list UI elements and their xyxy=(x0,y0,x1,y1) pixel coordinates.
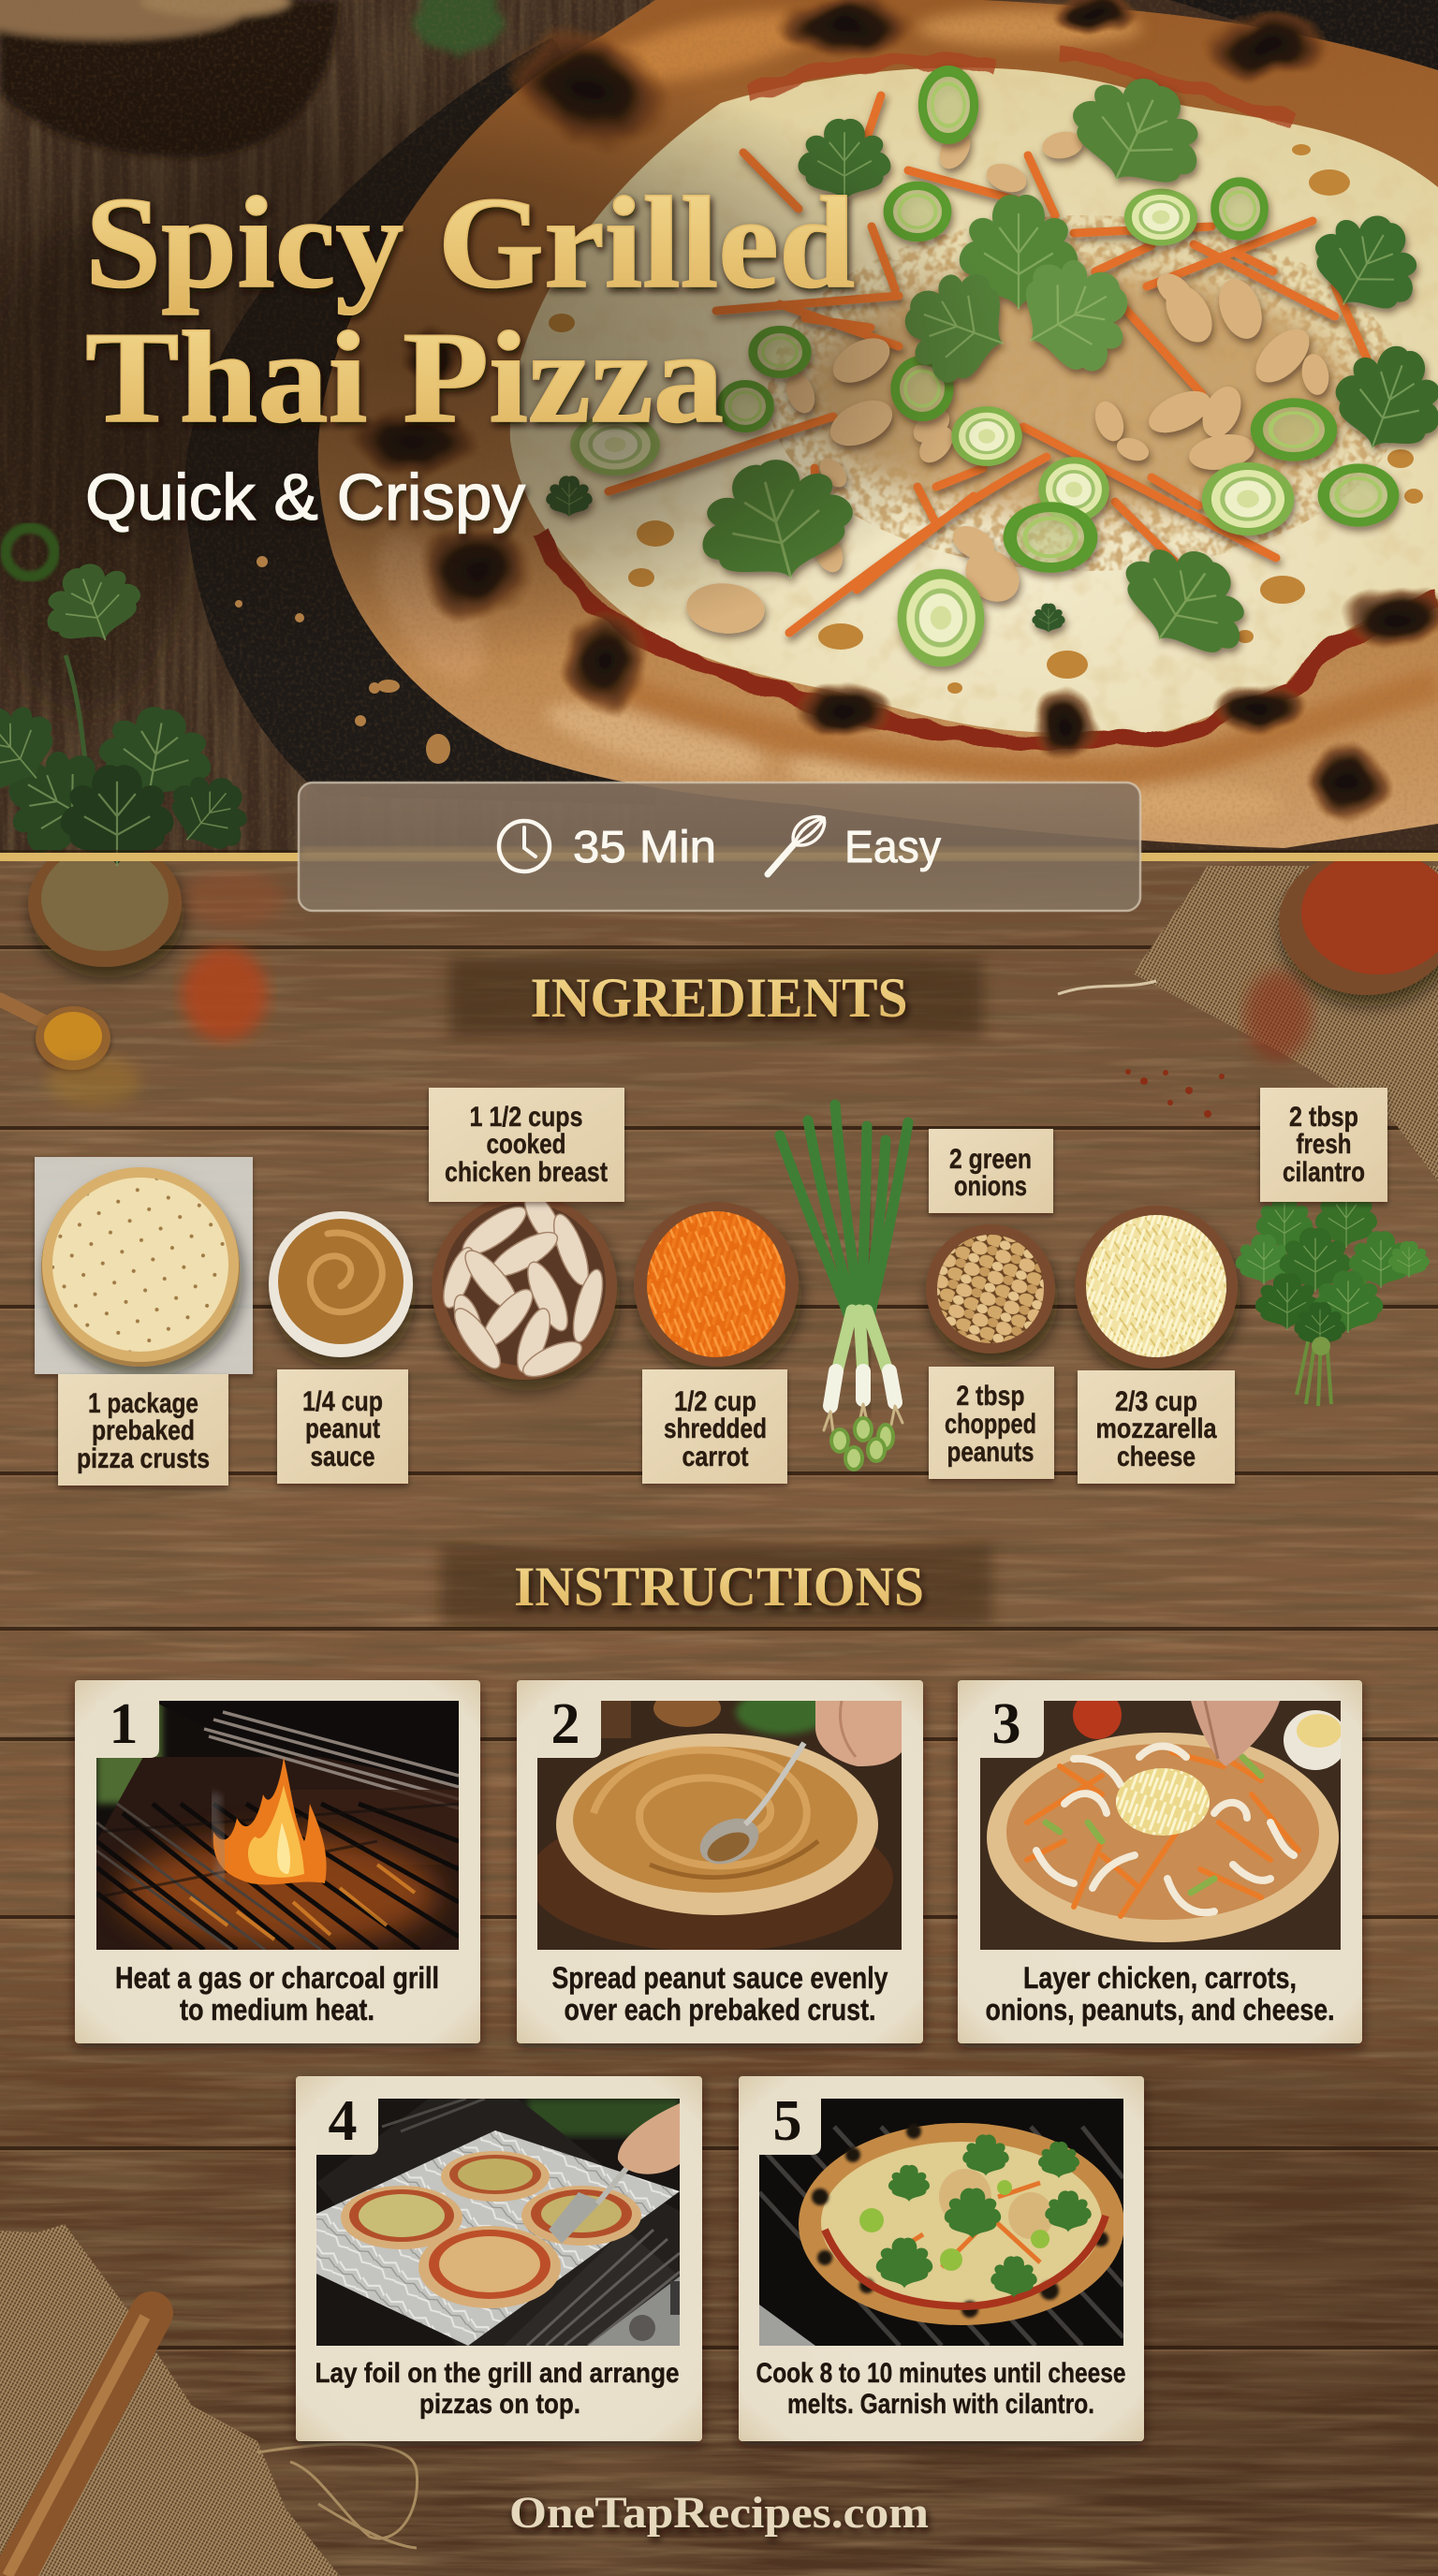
blurred peanut bowl xyxy=(0,0,339,157)
step 4 text: Lay foil on the grill and arrange xyxy=(315,2358,680,2389)
time and difficulty badge xyxy=(299,783,1140,911)
step 3 text: Layer chicken, carrots, xyxy=(1023,1961,1297,1995)
ingredient label: peanut sauce xyxy=(277,1369,408,1484)
step 4 image: pizzas on foil xyxy=(316,2099,680,2346)
cheese layer xyxy=(510,67,1438,735)
ingredient label: cilantro: fresh xyxy=(1296,1129,1352,1160)
step card 5: 5 xyxy=(773,2089,801,2153)
ingredient label: crust: prebaked xyxy=(92,1415,195,1446)
step card 3: 3 xyxy=(992,1692,1020,1756)
ingredient label: peanut sauce: sauce xyxy=(311,1442,374,1472)
number tab xyxy=(759,2099,821,2155)
step card 3 xyxy=(958,1680,1362,2043)
peanut mound xyxy=(805,271,1348,515)
ingredients heading xyxy=(449,958,983,1037)
step card 2: 2 xyxy=(550,1692,580,1756)
ingredient label: peanut sauce: peanut xyxy=(305,1413,380,1444)
ingredient: peanuts bowl xyxy=(926,1224,1055,1354)
step card 4 xyxy=(296,2076,702,2441)
scattered crumbs xyxy=(235,556,450,764)
ingredient label: crust xyxy=(58,1374,228,1486)
step 5 text: Cook 8 to 10 minutes until cheese xyxy=(756,2358,1125,2389)
step 1 image: flames on grill xyxy=(96,1701,459,1950)
toasted cheese spots xyxy=(549,144,1423,694)
carrot strips xyxy=(609,95,1367,633)
ingredient label: peanuts xyxy=(929,1367,1054,1479)
number tab xyxy=(537,1701,601,1758)
ingredient: chicken bowl xyxy=(432,1187,617,1383)
step 5 image: finished pizza on grill xyxy=(759,2099,1123,2346)
green onion rings xyxy=(575,71,1393,662)
step 1 text: to medium heat. xyxy=(180,1993,374,2027)
ingredient label: mozzarella: cheese xyxy=(1117,1442,1196,1472)
step card 4: 4 xyxy=(328,2089,358,2153)
wood table background xyxy=(0,861,1438,2576)
step 3 text: onions, peanuts, and cheese. xyxy=(985,1993,1335,2027)
ingredient label: peanuts: peanuts xyxy=(947,1437,1034,1468)
ingredient label: cilantro: 2 tbsp xyxy=(1289,1102,1358,1133)
ingredient: mozzarella bowl xyxy=(1075,1206,1238,1368)
ingredient: pizza crust xyxy=(35,1157,253,1374)
number tab xyxy=(96,1701,159,1758)
ingredient: cilantro bunch xyxy=(1236,1187,1430,1406)
ingredient: green onions xyxy=(780,1105,908,1470)
gold divider band xyxy=(0,850,1438,861)
ingredient label: peanut sauce: 1/4 cup xyxy=(302,1386,383,1417)
charred crust spots xyxy=(349,0,1438,823)
chopped peanuts xyxy=(684,125,1332,637)
ingredient label: chicken: cooked xyxy=(487,1129,565,1160)
icon: clock xyxy=(499,821,550,871)
ingredient label: chicken xyxy=(429,1088,624,1202)
step card 1: 1 xyxy=(109,1692,139,1756)
spice bowl: chili powder xyxy=(1279,849,1438,995)
burlap cloth and rolling pin: bottom left xyxy=(0,2224,418,2576)
pizza crust xyxy=(318,0,1438,848)
subtitle: Quick & Crispy xyxy=(85,461,525,534)
blurred herbs top xyxy=(413,0,505,59)
step 2 image: spreading peanut sauce xyxy=(537,1701,902,1950)
step 1 text: Heat a gas or charcoal grill xyxy=(115,1961,439,1995)
sauce edge xyxy=(538,51,1438,741)
icon: whisk xyxy=(768,816,825,874)
hero photo: grilled pizza on wood board xyxy=(0,0,1438,871)
step 2 text: over each prebaked crust. xyxy=(564,1993,876,2027)
ingredient label: peanuts: 2 tbsp xyxy=(957,1381,1024,1412)
ingredient label: carrot: 1/2 cup xyxy=(674,1386,756,1417)
ingredient label: mozzarella: 2/3 cup xyxy=(1115,1386,1197,1417)
ingredient label: peanuts: chopped xyxy=(945,1409,1036,1440)
step 3 text xyxy=(985,1961,1335,2027)
step card 1 xyxy=(75,1680,480,2043)
ingredient label: green onions xyxy=(929,1129,1053,1213)
ingredient label: cilantro xyxy=(1260,1088,1387,1202)
ingredients heading: INGREDIENTS xyxy=(530,967,908,1029)
soft dark overlay behind title xyxy=(0,47,1002,665)
time text: 35 Min xyxy=(573,823,716,872)
difficulty text: Easy xyxy=(844,823,941,872)
wooden spoon with turmeric xyxy=(0,1000,140,1107)
step 1 text xyxy=(115,1961,439,2027)
step 3 image: layering toppings xyxy=(980,1701,1341,1950)
left cilantro sprigs xyxy=(0,550,265,871)
ingredient label: mozzarella xyxy=(1078,1370,1235,1484)
spice bowl: coriander xyxy=(28,840,182,967)
ingredient label: crust: pizza crusts xyxy=(77,1443,210,1474)
ingredient label: chicken: chicken breast xyxy=(445,1157,608,1188)
step card 5 xyxy=(739,2076,1144,2441)
footer website: OneTapRecipes.com xyxy=(509,2488,929,2538)
dark serving board xyxy=(185,37,712,805)
number tab xyxy=(980,1701,1044,1758)
ingredient label: carrot: carrot xyxy=(682,1442,749,1472)
ingredient: peanut sauce xyxy=(269,1211,413,1357)
ingredient: carrot bowl xyxy=(634,1202,799,1367)
ingredient label: crust: 1 package xyxy=(88,1388,198,1419)
step 4 text: pizzas on top. xyxy=(419,2389,580,2420)
title xyxy=(85,170,855,450)
step 5 text: melts. Garnish with cilantro. xyxy=(787,2389,1094,2420)
title: Spicy Grilled xyxy=(85,170,855,315)
number tab xyxy=(316,2099,378,2155)
ingredient label: green onions: 2 green xyxy=(949,1144,1032,1175)
title: Thai Pizza xyxy=(85,305,724,450)
ingredient label: green onions: onions xyxy=(954,1171,1027,1202)
ingredient label: carrot: shredded xyxy=(664,1413,767,1444)
red chili flakes xyxy=(1125,971,1312,1118)
ingredient label: chicken: 1 1/2 cups xyxy=(470,1102,582,1133)
ingredient label: carrot xyxy=(642,1369,787,1484)
cilantro leaves xyxy=(546,56,1438,678)
step 2 text: Spread peanut sauce evenly xyxy=(552,1961,888,1995)
toasted crust highlights xyxy=(356,0,1438,824)
burlap cloth: top right xyxy=(1058,866,1438,1181)
step 2 text xyxy=(552,1961,888,2027)
instructions heading xyxy=(440,1544,992,1624)
step card 2 xyxy=(517,1680,923,2043)
spilled chili powder xyxy=(182,871,286,1041)
instructions heading: INSTRUCTIONS xyxy=(514,1556,924,1617)
ingredient label: mozzarella: mozzarella xyxy=(1095,1413,1217,1444)
step 4 text xyxy=(315,2358,680,2420)
ingredient label: cilantro: cilantro xyxy=(1283,1157,1365,1188)
step 5 text xyxy=(756,2358,1125,2420)
